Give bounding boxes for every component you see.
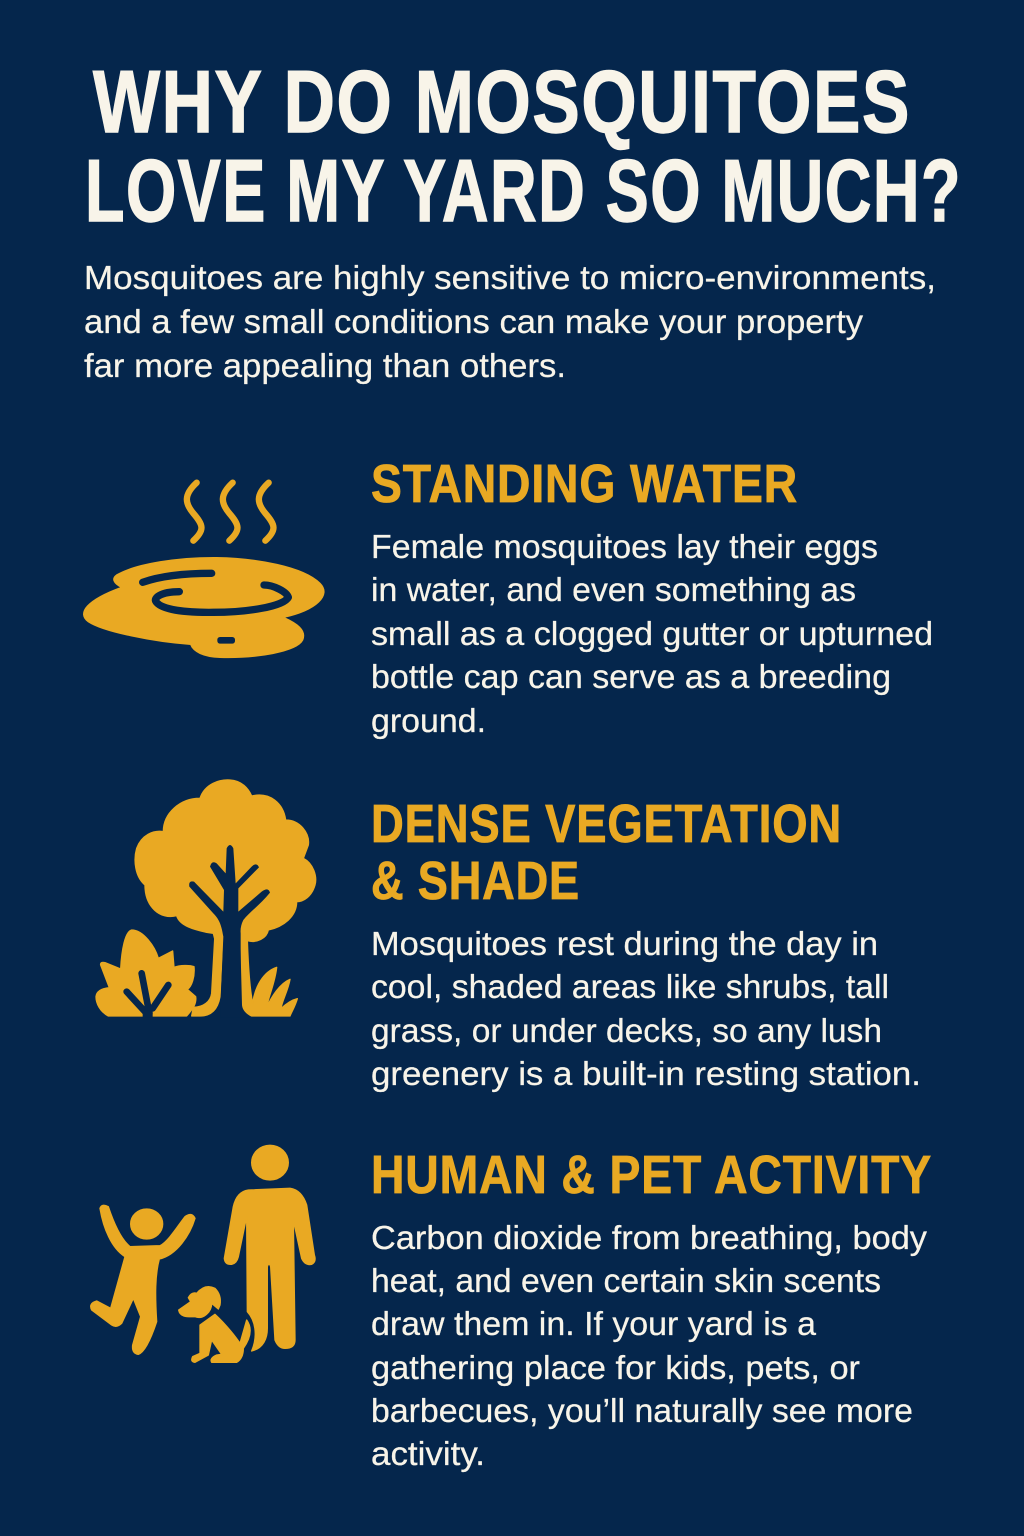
panel: dense vegetation and shade <box>96 780 921 1092</box>
text: human and pet activity: barbecues, you’ll naturally see more <box>371 1392 913 1429</box>
text: human and pet activity: Carbon dioxide from breathing, body <box>371 1219 928 1256</box>
panel: standing water <box>84 454 933 739</box>
text: human and pet activity: heat, and even certain skin scents <box>371 1262 881 1299</box>
text: dense vegetation and shade <box>371 925 921 1092</box>
text: standing water: bottle cap can serve as a breeding <box>371 658 891 695</box>
text: dense vegetation and shade: Mosquitoes rest during the day in <box>371 925 878 962</box>
icon: steaming puddle <box>84 483 324 657</box>
text: standing water <box>371 528 933 739</box>
panel: human and pet activity <box>91 1145 932 1472</box>
text: human and pet activity: activity. <box>371 1435 485 1472</box>
heading: dense vegetation and shade: DENSE VEGETATION <box>371 794 842 854</box>
heading: standing water: STANDING WATER <box>371 454 798 514</box>
icon: tree, bush and grass <box>96 780 316 1017</box>
text: human and pet activity: gathering place for kids, pets, or <box>371 1349 860 1386</box>
text: standing water: Female mosquitoes lay their eggs <box>371 528 878 565</box>
text: human and pet activity <box>371 1219 928 1472</box>
icon: adult, child and dog <box>91 1145 315 1362</box>
intro text: Mosquitoes are highly sensitive to micro-environments, <box>84 259 936 296</box>
intro text <box>84 259 936 384</box>
intro text: far more appealing than others. <box>84 347 566 384</box>
text: dense vegetation and shade: grass, or under decks, so any lush <box>371 1012 882 1049</box>
text: human and pet activity: draw them in. If your yard is a <box>371 1305 817 1342</box>
text: dense vegetation and shade: greenery is a built-in resting station. <box>371 1055 921 1092</box>
text: dense vegetation and shade: cool, shaded areas like shrubs, tall <box>371 968 889 1005</box>
text: standing water: small as a clogged gutter or upturned <box>371 615 933 652</box>
intro text: and a few small conditions can make your property <box>84 303 864 340</box>
heading: dense vegetation and shade <box>371 794 842 911</box>
text: standing water: in water, and even something as <box>371 571 856 608</box>
heading: dense vegetation and shade: & SHADE <box>371 851 580 911</box>
text: standing water: ground. <box>371 702 486 739</box>
title <box>85 52 962 240</box>
heading: human and pet activity: HUMAN & PET ACTIVITY <box>371 1145 932 1205</box>
